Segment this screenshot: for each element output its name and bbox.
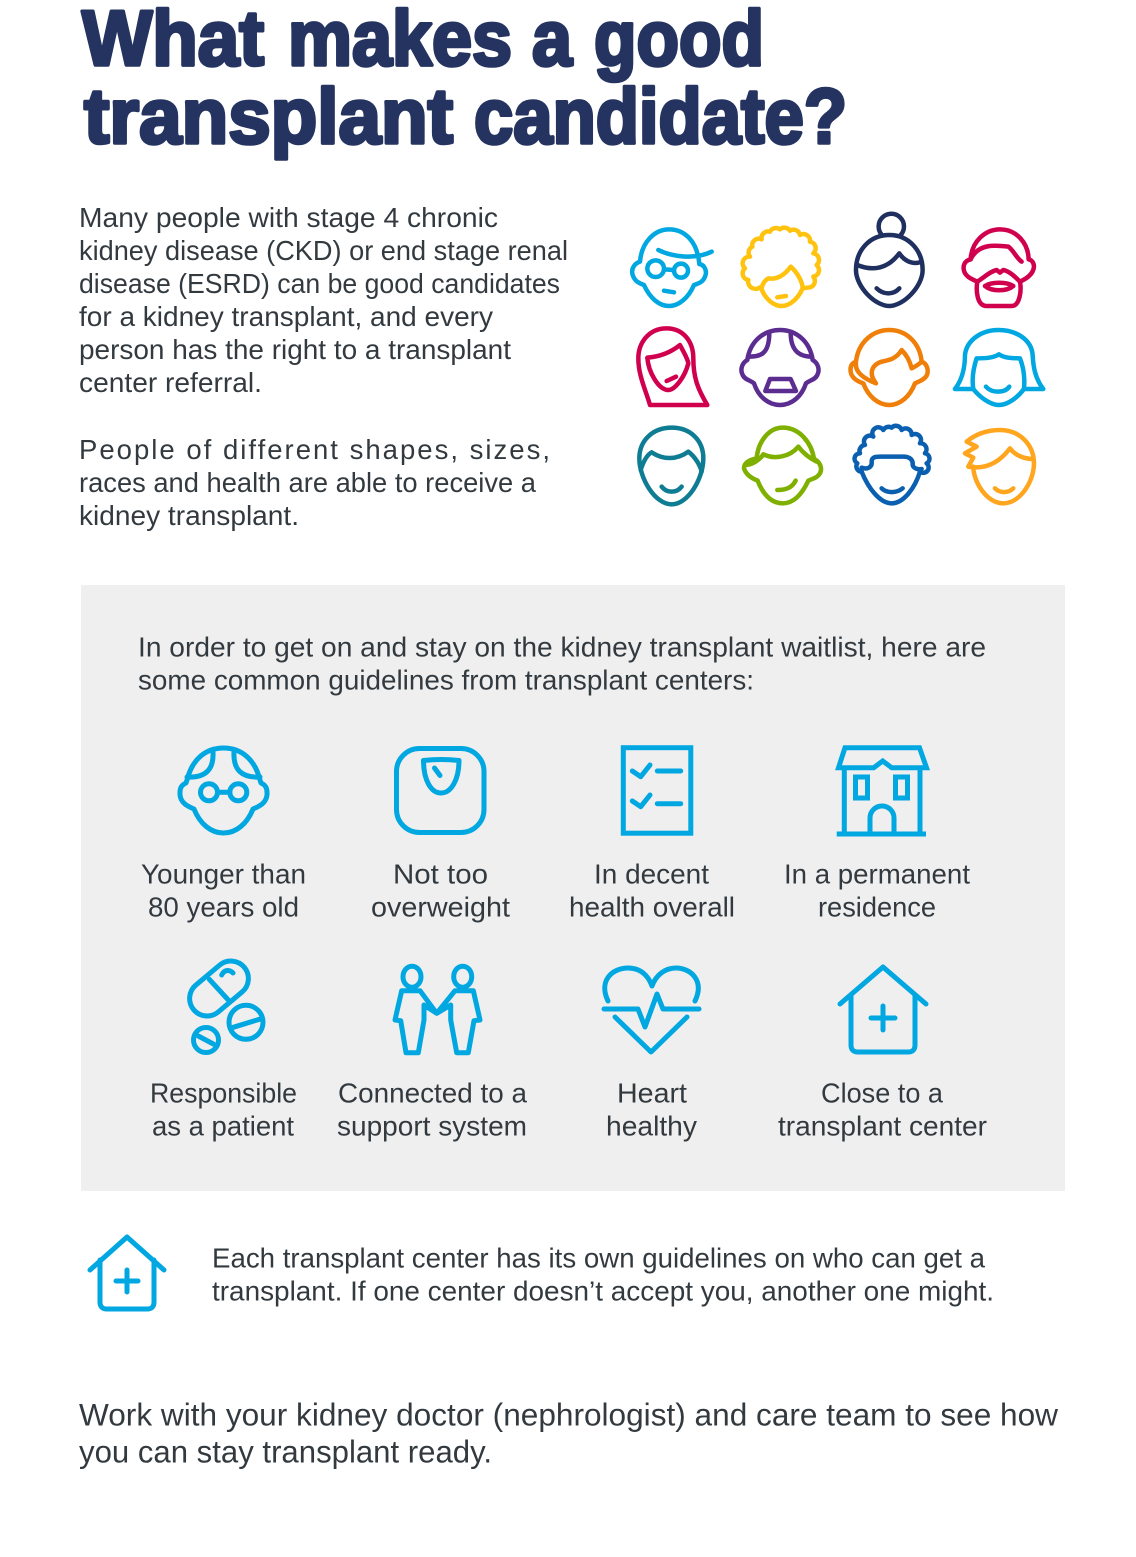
icon: pills — [182, 954, 263, 1052]
callout text: Each transplant center has its own guidelines on who can get a — [212, 1242, 986, 1274]
panel heading: In order to get on and stay on the kidney transplant waitlist, here are — [138, 632, 986, 662]
intro paragraph: kidney disease (CKD) or end stage renal — [79, 235, 568, 266]
label: proximity: transplant center — [778, 1110, 987, 1142]
icon: residence — [837, 748, 926, 834]
second paragraph: People of different shapes, sizes, — [79, 434, 550, 465]
intro paragraph: for a kidney transplant, and every — [79, 301, 493, 332]
label: residence — [784, 858, 970, 922]
icon: face row 1 — [632, 214, 1034, 306]
label: proximity — [778, 1078, 987, 1142]
second paragraph: kidney transplant. — [79, 500, 299, 531]
label: proximity: Close to a — [821, 1078, 944, 1108]
icon: two people — [395, 966, 480, 1053]
panel heading: some common guidelines from transplant centers: — [138, 664, 754, 696]
label: heart: healthy — [606, 1110, 697, 1142]
closing statement: Work with your kidney doctor (nephrologist) and care team to see how — [79, 1396, 1058, 1432]
faces grid — [632, 214, 1043, 504]
closing statement: you can stay transplant ready. — [79, 1434, 492, 1470]
title — [82, 0, 847, 160]
label: support — [337, 1078, 528, 1142]
label: patient — [150, 1078, 297, 1142]
label: weight — [371, 858, 510, 922]
intro paragraph — [79, 202, 568, 398]
panel heading — [138, 632, 986, 696]
icon: face rows 2 and 3 — [638, 328, 1043, 504]
icon: scale — [396, 748, 484, 832]
icon: transplant center house — [840, 967, 926, 1052]
callout text — [212, 1242, 994, 1306]
icon: callout house — [90, 1237, 164, 1309]
label: weight: Not too — [393, 858, 488, 890]
label: heart: Heart — [617, 1078, 687, 1108]
label: age: Younger than — [141, 858, 306, 890]
title: transplant — [84, 72, 453, 160]
label: age — [141, 858, 306, 922]
label: health — [569, 858, 735, 922]
intro paragraph: center referral. — [79, 367, 262, 398]
label: heart — [606, 1078, 697, 1142]
panel: guidelines — [81, 585, 1065, 1191]
icon: checklist — [623, 748, 691, 833]
icon: heart with pulse — [604, 968, 699, 1052]
intro paragraph: person has the right to a transplant — [79, 334, 511, 365]
label: patient: as a patient — [152, 1110, 294, 1142]
closing statement — [79, 1396, 1058, 1470]
callout text: transplant. If one center doesn’t accept you, another one might. — [212, 1276, 994, 1306]
intro paragraph: Many people with stage 4 chronic — [79, 202, 498, 233]
icon: older person — [180, 748, 267, 833]
second paragraph: races and health are able to receive a — [79, 467, 537, 498]
label: residence: residence — [818, 892, 936, 922]
label: health: health overall — [569, 892, 735, 922]
label: weight: overweight — [371, 892, 510, 922]
title: candidate? — [474, 72, 847, 160]
label: residence: In a permanent — [784, 858, 970, 890]
label: support: support system — [337, 1110, 527, 1142]
label: patient: Responsible — [150, 1078, 297, 1108]
label: support: Connected to a — [338, 1078, 528, 1108]
label: health: In decent — [594, 858, 709, 890]
second paragraph — [79, 434, 550, 531]
intro paragraph: disease (ESRD) can be good candidates — [79, 268, 560, 299]
label: age: 80 years old — [148, 892, 299, 922]
